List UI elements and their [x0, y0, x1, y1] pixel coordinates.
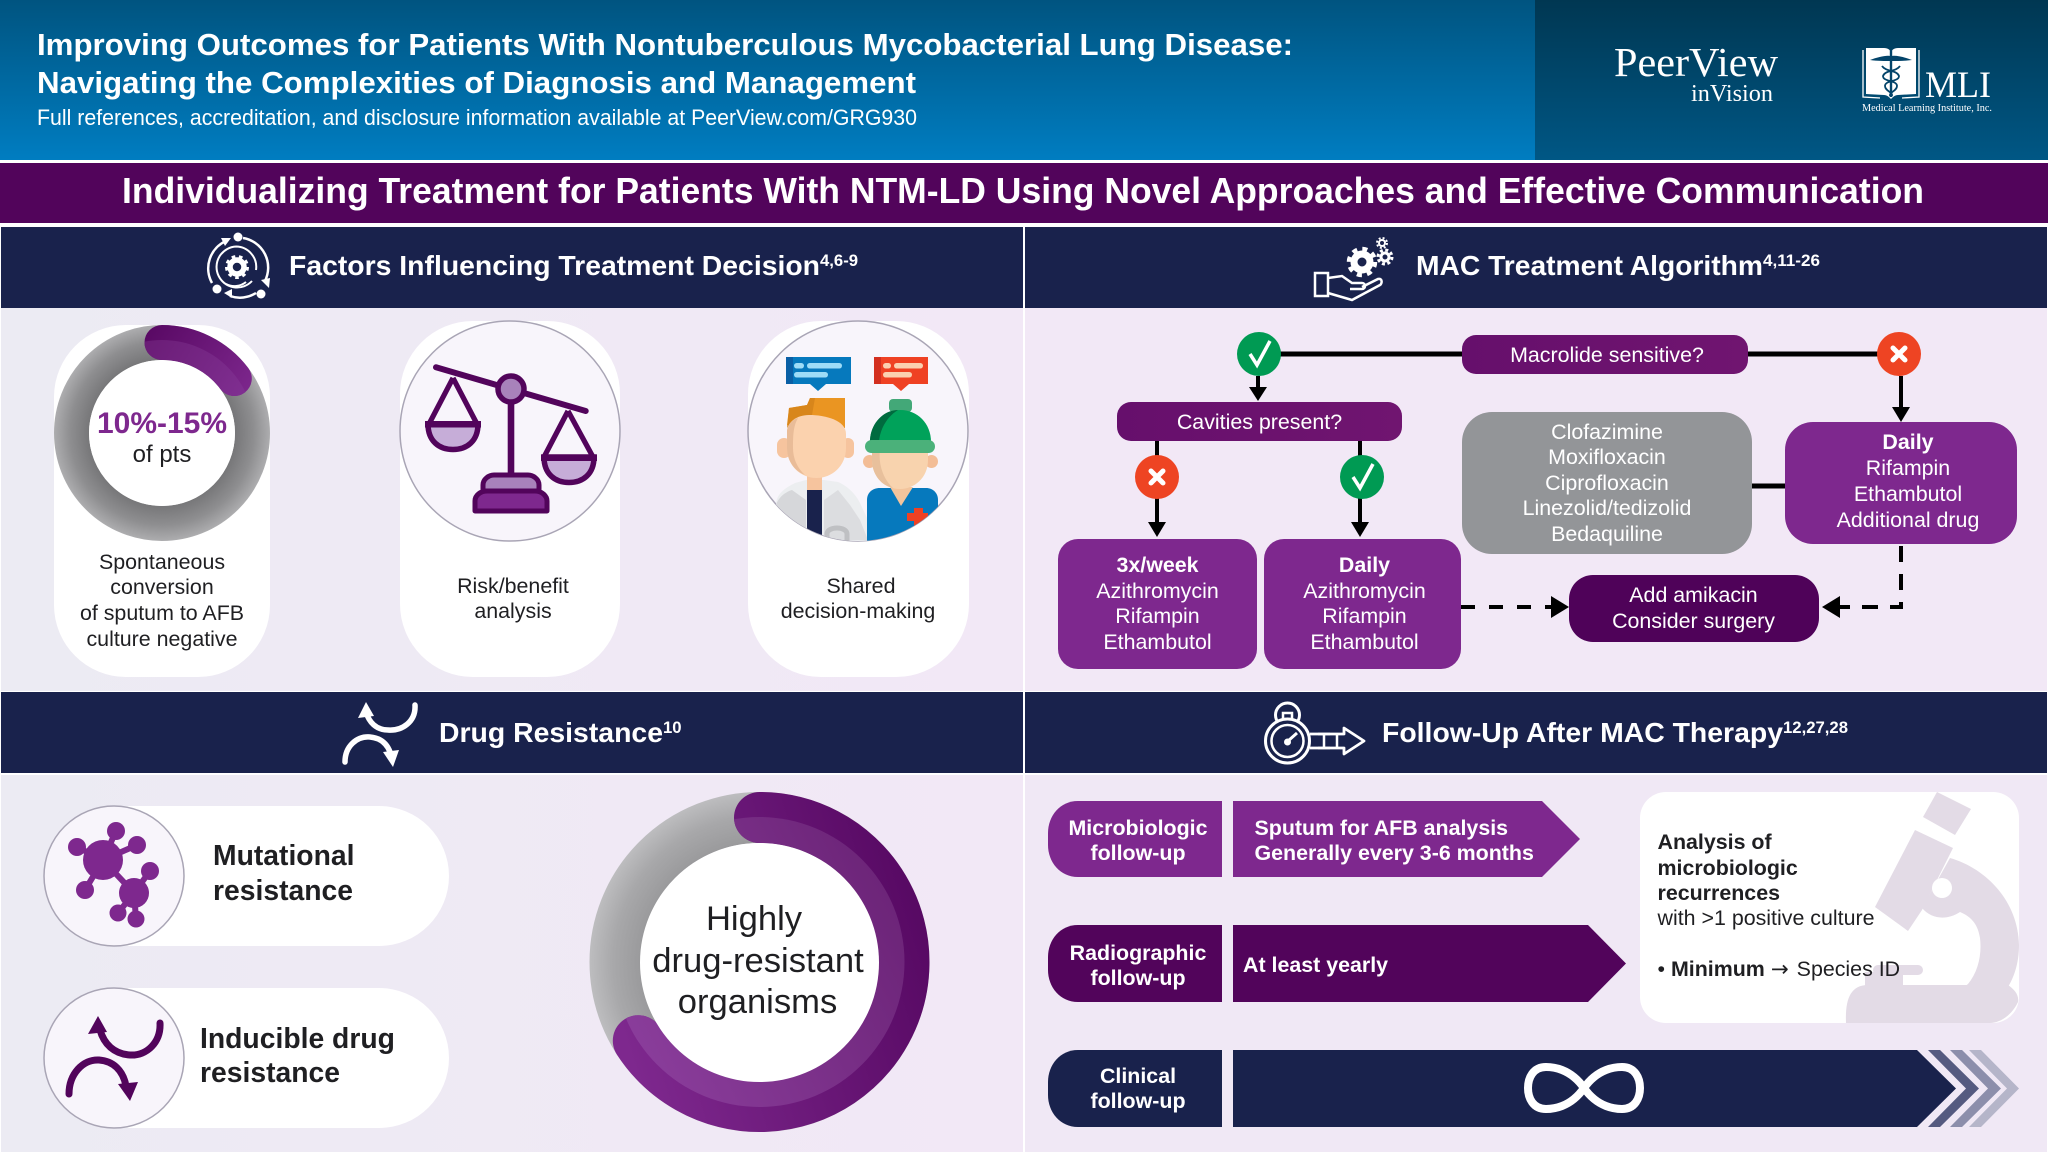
- donut chart: 10%-15% of pts: 10%-15%: [97, 407, 227, 440]
- card: inducible drug resistance: Inducible drug: [200, 1022, 395, 1054]
- box: alternative drugs: [1462, 412, 1752, 554]
- box: daily regimen: Daily: [1339, 553, 1390, 577]
- box: alternative drugs: Ciprofloxacin: [1545, 471, 1669, 495]
- card: mutational resistance: Mutational: [213, 839, 354, 871]
- section header: drug resistance: [1, 692, 1023, 773]
- decision: cavities present: Cavities present?: [1177, 410, 1342, 434]
- icon: yes check: [1237, 332, 1281, 376]
- section header: factors: Factors Influencing Treatment Decision: [289, 250, 820, 281]
- text: analysis: [1656, 830, 1900, 982]
- box: 3x/week regimen: [1058, 539, 1257, 669]
- card: risk/benefit analysis: [400, 321, 620, 677]
- box: alternative drugs: Moxifloxacin: [1548, 445, 1666, 469]
- icon: no cross: [1877, 332, 1921, 376]
- header banner: [0, 0, 2048, 160]
- title: Navigating the Complexities of Diagnosis and Management: [37, 65, 916, 100]
- decision: cavities present: [1117, 402, 1402, 441]
- icon: opposing arrows: [345, 702, 415, 767]
- logo: PeerView inVision: PeerView: [1614, 39, 1778, 85]
- flowchart connectors: [1157, 354, 1901, 607]
- section header: follow-up: [1025, 692, 2047, 773]
- row: radiographic follow-up: Radiographic: [1070, 941, 1206, 965]
- box: macrolide resistant regimen: Rifampin: [1866, 456, 1950, 480]
- text: shared decision-making: decision-making: [781, 599, 935, 623]
- icon: infinity: [1528, 1067, 1640, 1109]
- text: analysis: • Minimum → Species ID: [1658, 957, 1900, 982]
- card: mutational resistance: [44, 806, 449, 946]
- icon: stopwatch with arrow: [1266, 703, 1364, 763]
- icon: doctor and patient: [776, 357, 938, 550]
- donut: highly drug-resistant organisms: organisms: [678, 983, 837, 1021]
- text: analysis: Analysis of: [1658, 830, 1772, 854]
- text: analysis: with >1 positive culture: [1656, 906, 1874, 930]
- icon: purple opposing arrows: [69, 1016, 160, 1101]
- row: radiographic follow-up: [1048, 925, 1626, 1002]
- box: daily regimen: [1264, 539, 1461, 669]
- arrowheads: [1148, 387, 1910, 618]
- row: clinical follow-up: [1048, 1050, 2019, 1127]
- logo: MLI: MLI: [1925, 65, 1991, 106]
- text: shared decision-making: Shared: [827, 574, 895, 598]
- section header: MAC: MAC Treatment Algorithm: [1416, 250, 1763, 281]
- box: macrolide resistant regimen: Ethambutol: [1854, 482, 1962, 506]
- panel: MAC treatment algorithm: [1025, 227, 2047, 691]
- box: daily regimen: Rifampin: [1322, 604, 1407, 628]
- donut: highly drug-resistant organisms: [615, 818, 904, 1106]
- box: 3x/week regimen: Rifampin: [1115, 604, 1200, 628]
- text: spontaneous conversion: [80, 550, 244, 651]
- section header: follow-up: 12,27,28: [1783, 718, 1848, 737]
- text: analysis: recurrences: [1658, 881, 1780, 905]
- text: spontaneous conversion: culture negative: [86, 627, 238, 651]
- box: 3x/week regimen: 3x/week: [1116, 553, 1199, 577]
- card: analysis of microbiologic recurrences: [1640, 792, 2019, 1023]
- donut: highly drug-resistant organisms: drug-resistant: [652, 942, 864, 980]
- row: microbiologic follow-up: Microbiologic: [1068, 816, 1208, 840]
- card: mutational resistance: resistance: [213, 874, 353, 906]
- box: macrolide resistant regimen: [1785, 422, 2017, 544]
- main title band: [0, 163, 2048, 223]
- title: Full references, accreditation, and disclosure information available at PeerView.com/GRG930: [37, 105, 917, 130]
- row: microbiologic follow-up: Generally every 3-6 months: [1254, 841, 1534, 865]
- donut: highly drug-resistant organisms: Highly: [706, 900, 803, 938]
- icon: cavities yes: [1340, 455, 1384, 499]
- row: microbiologic follow-up: Sputum for AFB analysis: [1254, 816, 1508, 840]
- box: alternative drugs: Bedaquiline: [1551, 522, 1663, 546]
- donut chart: 10%-15% of pts: of pts: [133, 441, 191, 468]
- decision: macrolide sensitive: Macrolide sensitive?: [1510, 343, 1704, 367]
- section header: drug resistance: Drug Resistance: [439, 717, 663, 748]
- panel: factors influencing treatment decision: [1, 227, 1023, 691]
- row: clinical follow-up: Clinical: [1100, 1064, 1176, 1088]
- icon: cavities no: [1135, 455, 1179, 499]
- text: risk/benefit: analysis: [474, 599, 552, 623]
- box: daily regimen: Azithromycin: [1303, 579, 1426, 603]
- main title band: Individualizing Treatment for Patients With NTM-LD Using Novel Approaches and Effective Communication: [122, 170, 1924, 211]
- title: Improving Outcomes for Patients With Nontuberculous Mycobacterial Lung Disease:: [37, 27, 1293, 62]
- section header: MAC: [1025, 227, 2047, 308]
- text: risk/benefit: Risk/benefit: [457, 574, 569, 598]
- text: risk/benefit: [457, 574, 569, 623]
- row: microbiologic follow-up: follow-up: [1090, 841, 1186, 865]
- card: spontaneous conversion: [54, 325, 270, 677]
- icon: cycle gear: [208, 232, 270, 298]
- section header: factors: [1, 227, 1023, 308]
- decision: macrolide sensitive: [1462, 335, 1748, 374]
- row: radiographic follow-up: follow-up: [1090, 966, 1186, 990]
- panel: drug resistance: [1, 692, 1023, 1152]
- section header: factors: 4,6-9: [820, 251, 858, 270]
- section header: drug resistance: 10: [663, 718, 682, 737]
- box: 3x/week regimen: Ethambutol: [1103, 630, 1212, 654]
- logo: MLI: [1862, 48, 1992, 114]
- row: radiographic follow-up: At least yearly: [1243, 953, 1388, 977]
- text: spontaneous conversion: of sputum to AFB: [80, 601, 244, 625]
- donut chart: 10%-15% of pts: [72, 342, 252, 524]
- row: clinical follow-up: follow-up: [1090, 1089, 1186, 1113]
- box: alternative drugs: Clofazimine: [1551, 420, 1663, 444]
- icon: balance scale: [425, 367, 597, 511]
- text: spontaneous conversion: conversion: [110, 575, 214, 599]
- text: analysis: microbiologic: [1658, 856, 1798, 880]
- box: daily regimen: Ethambutol: [1310, 630, 1419, 654]
- text: shared decision-making: [781, 574, 935, 623]
- section header: follow-up: Follow-Up After MAC Therapy: [1382, 717, 1783, 748]
- logo: MLI: Medical Learning Institute, Inc.: [1862, 102, 1992, 114]
- icon: microscope watermark: [1846, 792, 2019, 1023]
- title: [37, 27, 1293, 130]
- icon: hand with gears: [1315, 238, 1392, 300]
- card: shared decision-making: [748, 321, 969, 677]
- box: 3x/week regimen: Azithromycin: [1096, 579, 1219, 603]
- section header: MAC: 4,11-26: [1763, 251, 1820, 270]
- box: macrolide resistant regimen: Additional drug: [1837, 508, 1979, 532]
- card: inducible drug resistance: [44, 988, 449, 1128]
- icon: molecule: [68, 822, 159, 928]
- box: add amikacin: Add amikacin: [1629, 583, 1758, 607]
- box: add amikacin: Consider surgery: [1612, 609, 1775, 633]
- box: alternative drugs: Linezolid/tedizolid: [1523, 496, 1691, 520]
- card: inducible drug resistance: resistance: [200, 1056, 340, 1088]
- box: add amikacin: [1569, 575, 1819, 642]
- logo: PeerView inVision: inVision: [1691, 81, 1773, 107]
- logo: PeerView inVision: [1614, 39, 1778, 107]
- panel: follow-up after MAC therapy: [1025, 692, 2047, 1152]
- row: microbiologic follow-up: [1048, 801, 1580, 877]
- text: spontaneous conversion: Spontaneous: [99, 550, 225, 574]
- box: macrolide resistant regimen: Daily: [1882, 430, 1934, 454]
